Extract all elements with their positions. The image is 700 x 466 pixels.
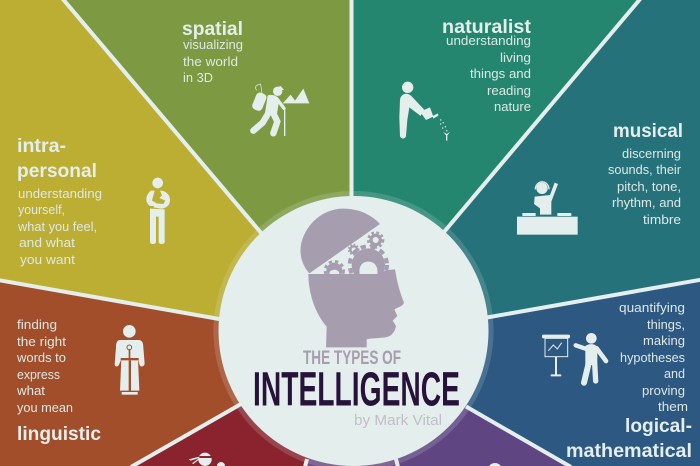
text block: logical-mathematical: mathematical xyxy=(566,441,692,462)
text block: linguistic: express xyxy=(17,367,60,382)
text block: naturalist: reading xyxy=(487,83,531,98)
byline: by Mark Vital xyxy=(354,412,442,429)
text block: linguistic xyxy=(16,317,101,445)
text block: logical-mathematical: hypotheses xyxy=(620,350,685,365)
center circle xyxy=(218,196,488,466)
text block: logical-mathematical: logical- xyxy=(625,416,692,437)
text block: spatial: visualizing xyxy=(183,37,243,52)
text block: musical: rhythm, and xyxy=(612,195,681,210)
panel: linguistic wedge xyxy=(0,280,353,466)
text block: intra-personal: personal xyxy=(17,161,97,182)
icon: person watering plant xyxy=(399,82,450,141)
text block: logical-mathematical: and xyxy=(664,366,685,381)
text block: naturalist: understanding xyxy=(446,33,531,48)
icon: thinking person xyxy=(146,178,170,244)
text block: linguistic: words to xyxy=(16,350,66,365)
text block: logical-mathematical: proving xyxy=(642,383,685,398)
text block: spatial xyxy=(182,19,243,85)
panel: spatial wedge xyxy=(62,0,353,331)
text block: logical-mathematical: them xyxy=(658,399,688,414)
text block: musical: pitch, tone, xyxy=(617,179,681,194)
text block: linguistic: finding xyxy=(17,317,57,332)
text block: spatial: in 3D xyxy=(183,70,213,85)
text block: intra-personal: and what xyxy=(19,235,75,250)
text block: linguistic: you mean xyxy=(17,400,73,415)
text block: linguistic: what xyxy=(16,383,45,398)
title: the types of: THE TYPES OF xyxy=(303,347,401,369)
text block: musical: musical xyxy=(613,121,683,142)
icon: speaker at podium xyxy=(115,325,145,395)
panel: bodily wedge xyxy=(353,331,570,466)
icon: DJ xyxy=(517,182,578,235)
text block: intra-personal: understanding xyxy=(18,186,102,201)
text block: linguistic: the right xyxy=(17,334,66,349)
panel: musical wedge xyxy=(353,0,700,331)
text block: intra-personal: intra- xyxy=(17,136,66,157)
panel: logical-mathematical wedge xyxy=(353,280,700,466)
text block: intra-personal: you want xyxy=(20,252,75,267)
text block: linguistic: linguistic xyxy=(17,424,101,445)
text block: intra-personal xyxy=(17,136,102,267)
text block: musical: discerning xyxy=(622,146,681,161)
panel: crimson wedge xyxy=(132,331,353,466)
text block: musical: timbre xyxy=(643,212,681,227)
panel: naturalist wedge xyxy=(352,0,640,331)
text block: naturalist xyxy=(442,17,532,114)
text block: logical-mathematical: quantifying xyxy=(619,300,685,315)
icon: head with gears xyxy=(301,209,404,347)
text block: musical: sounds, their xyxy=(608,162,682,177)
panel: intra-personal wedge xyxy=(0,0,353,331)
panel: interpersonal wedge xyxy=(307,331,397,466)
text block: musical xyxy=(608,121,683,227)
title: intelligence: INTELLIGENCE xyxy=(253,364,460,416)
text block: naturalist: naturalist xyxy=(442,17,532,38)
icon: hiker xyxy=(251,84,309,136)
icon: purple panel figure (cropped) xyxy=(488,463,502,466)
icon: presenter with chart xyxy=(542,333,606,383)
text block: logical-mathematical xyxy=(566,300,692,462)
text block: naturalist: nature xyxy=(494,99,531,114)
text block: intra-personal: yourself, xyxy=(18,202,65,217)
text block: spatial: the world xyxy=(183,54,238,69)
text block: spatial: spatial xyxy=(182,19,243,40)
text block: intra-personal: what you feel, xyxy=(17,219,97,234)
text block: naturalist: things and xyxy=(470,66,531,81)
text block: logical-mathematical: making xyxy=(643,333,685,348)
icon: crimson panel figure (cropped) xyxy=(189,453,225,466)
text block: logical-mathematical: things, xyxy=(647,317,685,332)
text block: naturalist: living xyxy=(500,50,531,65)
inner ring xyxy=(214,191,494,466)
